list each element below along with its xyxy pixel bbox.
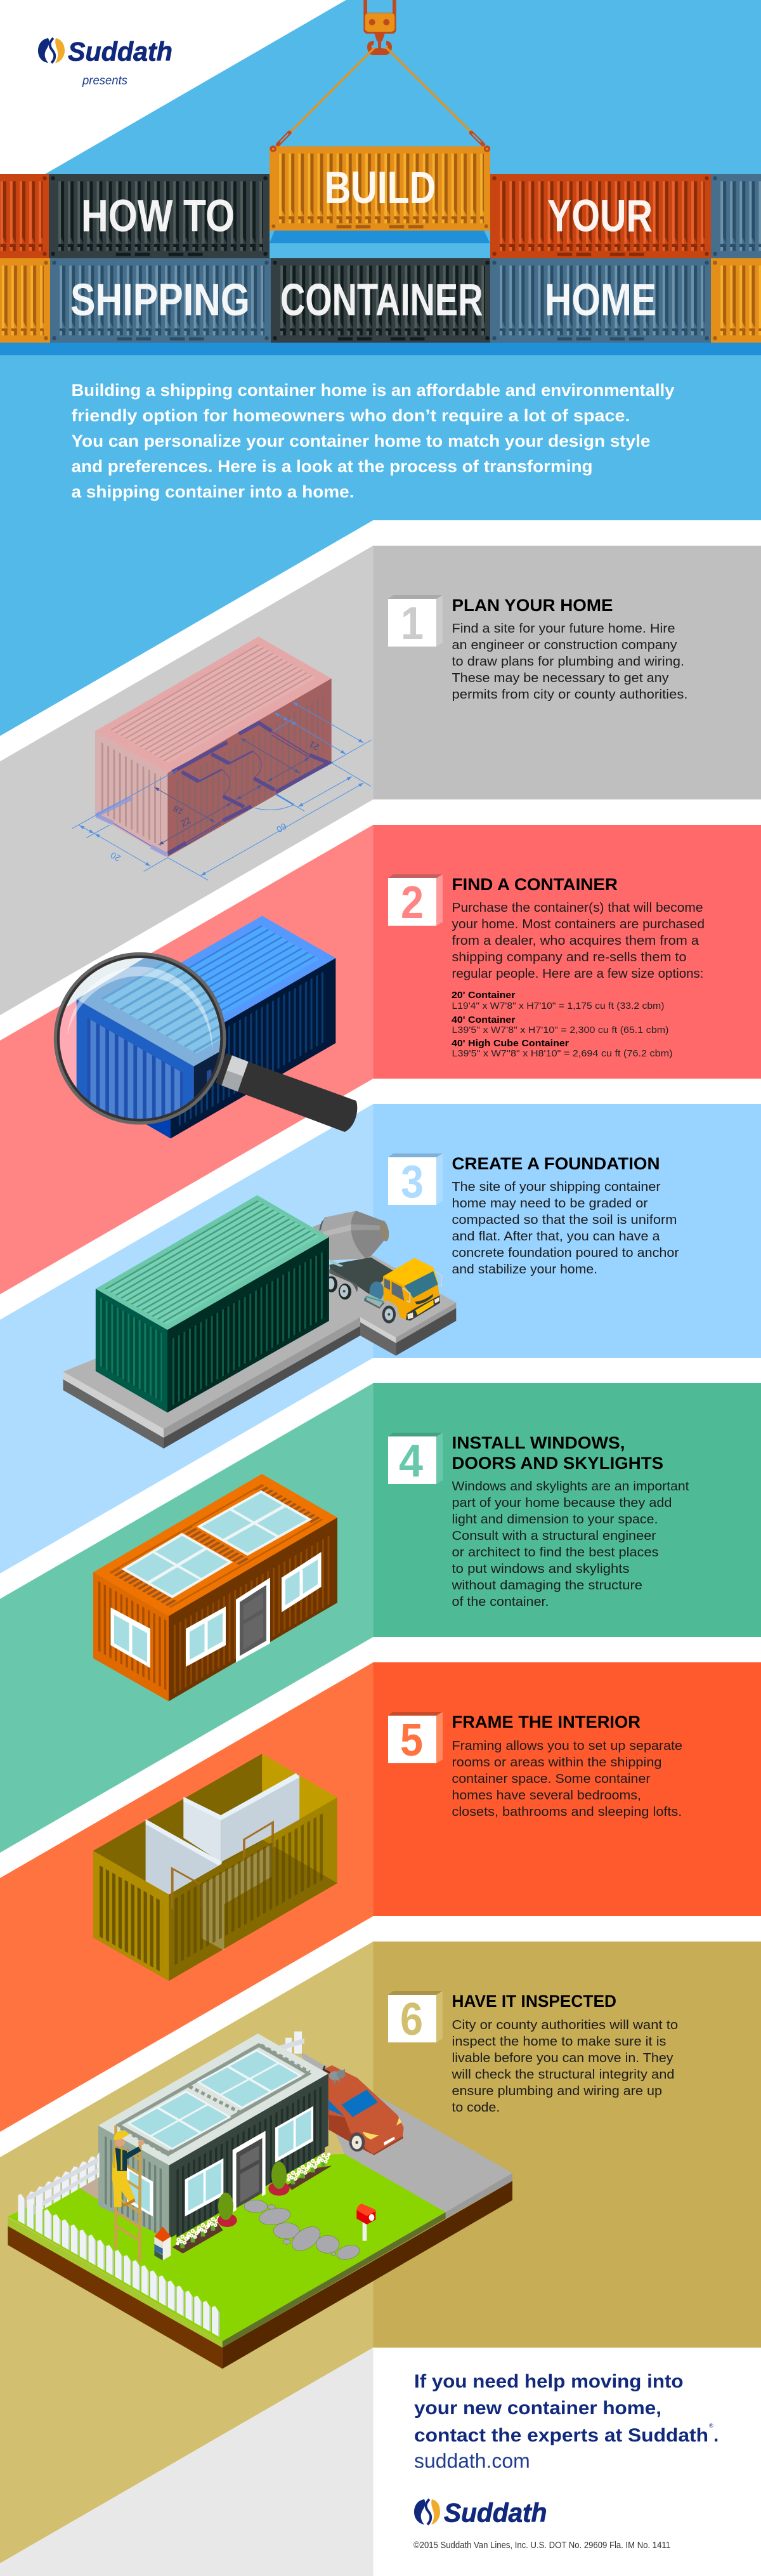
body 4: light and dimension to your space. xyxy=(452,1512,658,1527)
illustration: container on foundation with mixer truck xyxy=(63,1195,456,1449)
container: yellow right xyxy=(711,258,761,343)
container top xyxy=(97,916,335,1053)
intro text: friendly option for homeowners who don’t require a lot of space. xyxy=(71,406,630,425)
left wall window xyxy=(127,2167,153,2216)
body 2: Purchase the container(s) that will become xyxy=(452,900,703,915)
fence: back row xyxy=(27,2152,100,2219)
body 1: permits from city or county authorities. xyxy=(452,687,687,702)
container size list: L39'5" x W7''8" x H8'10" = 2,694 cu ft (76.2 cbm) xyxy=(452,1049,672,1059)
title text: YOUR xyxy=(547,192,653,241)
panel: step 6 have it inspected xyxy=(388,1991,678,2115)
title text: HOME xyxy=(545,275,656,325)
container right face xyxy=(171,958,335,1138)
cat xyxy=(323,2066,330,2073)
body 6 xyxy=(451,2018,678,2115)
house skylights xyxy=(127,2091,231,2150)
corner hooks xyxy=(271,147,490,151)
concrete driveway xyxy=(300,2051,512,2212)
body 4: part of your home because they add xyxy=(452,1495,672,1510)
body 6: livable before you can move in. They xyxy=(452,2051,673,2065)
container size list: 40' Container xyxy=(452,1015,516,1025)
body 3: and flat. After that, you can have a xyxy=(452,1229,660,1244)
body 3: and stabilize your home. xyxy=(452,1262,597,1277)
heading 3: CREATE A FOUNDATION xyxy=(452,1154,660,1173)
container left face xyxy=(97,1011,171,1138)
container size list: L39'5" x W7'8" x H7'10" = 2,300 cu ft (65.1 cbm) xyxy=(452,1025,668,1035)
lawn xyxy=(8,2154,446,2341)
shipping container green xyxy=(96,1195,329,1330)
left wall window xyxy=(110,1608,150,1668)
dimension lines xyxy=(72,702,372,880)
heading 1: PLAN YOUR HOME xyxy=(452,596,613,615)
body 5: homes have several bedrooms, xyxy=(452,1788,641,1803)
magnifier handle xyxy=(216,1053,232,1086)
ladder xyxy=(116,2126,140,2262)
footer call to action: ® xyxy=(709,2422,713,2429)
body 3: compacted so that the soil is uniform xyxy=(452,1212,677,1227)
partition walls xyxy=(146,1820,223,1895)
footer call to action: contact the experts at Suddath xyxy=(414,2425,708,2446)
body 3: The site of your shipping container xyxy=(452,1180,661,1194)
lens ring xyxy=(58,957,222,1120)
body 4: to put windows and skylights xyxy=(452,1561,629,1576)
panel: step 5 frame the interior xyxy=(388,1712,682,1819)
body 5: closets, bathrooms and sleeping lofts. xyxy=(452,1804,682,1819)
number badge 6: 6 xyxy=(400,1994,423,2045)
left wall xyxy=(93,1572,169,1701)
title text: SHIPPING xyxy=(70,275,250,325)
right wall window 2 xyxy=(186,1607,226,1667)
illustration: container with windows, door and skylights xyxy=(93,1474,337,1701)
footer call to action: your new container home, xyxy=(414,2398,661,2419)
logo: Suddath top: Suddath xyxy=(68,37,172,67)
panel: step 1 plan your home xyxy=(388,595,687,702)
intro text: Building a shipping container home is an affordable and environmentally xyxy=(71,381,675,400)
body 1 xyxy=(452,621,687,702)
number badge 3: 3 xyxy=(401,1157,424,1207)
container: blue row 2 right xyxy=(490,258,711,343)
crane hook and lifting ropes xyxy=(278,0,483,145)
container: red left xyxy=(0,174,49,258)
container: blue right xyxy=(711,174,761,258)
footer call to action: If you need help moving into xyxy=(414,2371,684,2392)
back fence corner xyxy=(277,2032,304,2057)
number badge 5: 5 xyxy=(400,1715,423,1766)
body 3: concrete foundation poured to anchor xyxy=(452,1245,679,1260)
body 2: from a dealer, who acquires them from a xyxy=(452,933,699,948)
illustration: finished home with garden xyxy=(8,2032,512,2369)
heading 2: FIND A CONTAINER xyxy=(452,875,618,894)
footer call to action: . xyxy=(713,2425,719,2446)
flower beds xyxy=(172,2222,223,2254)
title text: CONTAINER xyxy=(280,275,483,325)
interior back walls xyxy=(93,1754,262,1938)
blue ground strip xyxy=(0,343,761,355)
number badge 1 xyxy=(388,595,443,649)
number badge 4: 4 xyxy=(399,1436,423,1487)
container top xyxy=(95,636,332,773)
garden gnome xyxy=(154,2226,171,2261)
intro text: You can personalize your container home to match your design style xyxy=(71,431,651,450)
container stack and title xyxy=(0,146,761,355)
footer link: suddath.com xyxy=(414,2449,530,2472)
dimension labels xyxy=(108,739,321,864)
container: red row 1 xyxy=(490,174,711,258)
number badge 3 xyxy=(388,1153,443,1207)
dimension labels: 20 xyxy=(108,850,122,864)
intro text xyxy=(71,381,675,501)
fence: front row xyxy=(18,2192,220,2337)
container: yellow left xyxy=(0,258,50,343)
logo: Suddath footer: Suddath xyxy=(444,2498,547,2528)
parked car xyxy=(323,2065,404,2155)
body 2: your home. Most containers are purchased xyxy=(452,917,705,931)
dimension labels: 21 xyxy=(307,739,321,752)
body 4 xyxy=(451,1479,689,1609)
dimension labels: 60 xyxy=(275,821,289,835)
heading 4: DOORS AND SKYLIGHTS xyxy=(452,1454,663,1473)
container: blue row 2 xyxy=(50,258,271,343)
title text xyxy=(70,163,656,325)
body 5: rooms or areas within the shipping xyxy=(452,1755,662,1770)
container: dark row 1 xyxy=(49,174,270,258)
house left wall xyxy=(98,2126,169,2238)
blue strip under lifted container xyxy=(270,230,490,243)
container: dark row 2 xyxy=(271,258,491,343)
body 6: to code. xyxy=(452,2100,500,2115)
cement mixer truck xyxy=(313,1211,442,1324)
door frames xyxy=(172,1822,273,1909)
intro text: and preferences. Here is a look at the process of transforming xyxy=(71,457,592,476)
container right face xyxy=(167,678,332,857)
door swing xyxy=(276,794,294,805)
container left face xyxy=(95,731,167,857)
body 5 xyxy=(452,1738,682,1819)
body 5: Framing allows you to set up separate xyxy=(452,1738,682,1753)
roof xyxy=(93,1474,337,1616)
skylight B xyxy=(121,1533,233,1598)
stepping stones xyxy=(244,2200,361,2262)
body 2 xyxy=(452,900,705,981)
right front face translucent xyxy=(169,1797,337,1981)
body 3: home may need to be graded or xyxy=(452,1196,648,1211)
illustration: translucent container with floor plan xyxy=(72,636,372,880)
illustration: framed interior xyxy=(93,1754,337,1981)
body 3 xyxy=(452,1180,679,1277)
body 2: shipping company and re-sells them to xyxy=(452,950,686,964)
floor plan walls xyxy=(168,723,328,853)
house roof xyxy=(98,2034,328,2165)
white corner behind logo xyxy=(0,0,346,174)
body 6: will check the structural integrity and xyxy=(451,2067,675,2082)
skylight A xyxy=(197,1490,312,1556)
footer call to action xyxy=(414,2371,719,2446)
body 6: City or county authorities will want to xyxy=(452,2018,678,2032)
soil layers xyxy=(8,2226,223,2369)
magnified lens content xyxy=(60,958,221,1119)
door xyxy=(233,2131,266,2212)
panel: step 3 create a foundation xyxy=(388,1153,679,1277)
copyright: ©2015 Suddath Van Lines, Inc. U.S. DOT No. 29609 Fla. IM No. 1411 xyxy=(413,2540,670,2551)
intro text: a shipping container into a home. xyxy=(71,482,354,501)
window 1 xyxy=(185,2159,223,2216)
container size list: 40' High Cube Container xyxy=(452,1039,569,1049)
title text: BUILD xyxy=(325,163,436,213)
mailbox xyxy=(356,2204,375,2241)
patio xyxy=(79,2176,98,2200)
number badge 6 xyxy=(388,1991,443,2045)
heading 6: HAVE IT INSPECTED xyxy=(452,1992,616,2011)
body 5: container space. Some container xyxy=(452,1771,651,1786)
right wall xyxy=(169,1518,337,1701)
container size list xyxy=(452,990,672,1059)
title text: HOW TO xyxy=(81,192,235,241)
number badge 1: 1 xyxy=(401,598,424,649)
number badge 2: 2 xyxy=(401,877,424,928)
body 6: ensure plumbing and wiring are up xyxy=(452,2084,662,2098)
body 4: or architect to find the best places xyxy=(452,1545,658,1560)
door xyxy=(236,1577,270,1662)
container: lifted yellow xyxy=(270,146,490,231)
heading 5: FRAME THE INTERIOR xyxy=(452,1712,641,1732)
right wall window 1 xyxy=(282,1552,322,1612)
number badge 4 xyxy=(388,1433,443,1487)
number badge 5 xyxy=(388,1712,443,1766)
heading 4 xyxy=(452,1433,663,1473)
panel: step 4 install windows xyxy=(388,1433,689,1609)
body 1: to draw plans for plumbing and wiring. xyxy=(452,654,684,669)
body 4: without damaging the structure xyxy=(451,1578,642,1593)
number badge 2 xyxy=(388,874,443,928)
dimension labels: 18 xyxy=(171,803,185,817)
text: presents: presents xyxy=(82,74,127,88)
concrete slab xyxy=(63,1255,456,1429)
body 6: inspect the home to make sure it is xyxy=(452,2034,666,2049)
body 4: Windows and skylights are an important xyxy=(452,1479,689,1494)
ghost walls on left face xyxy=(96,798,167,855)
worker on ladder xyxy=(112,2131,144,2207)
body 4: of the container. xyxy=(452,1594,549,1609)
container size list: 20' Container xyxy=(452,990,516,1001)
body 1: These may be necessary to get any xyxy=(452,671,669,685)
illustration: blue container under magnifying glass xyxy=(53,916,358,1138)
body 1: Find a site for your future home. Hire xyxy=(452,621,675,636)
body 1: an engineer or construction company xyxy=(452,638,677,652)
body 2: regular people. Here are a few size options: xyxy=(452,966,704,981)
container size list: L19'4" x W7'8" x H7'10" = 1,175 cu ft (33.2 cbm) xyxy=(452,1001,665,1011)
body 4: Consult with a structural engineer xyxy=(452,1528,656,1543)
left front face xyxy=(93,1851,169,1981)
house right wall xyxy=(169,2073,328,2238)
potted shrubs xyxy=(218,2162,290,2227)
window 2 xyxy=(275,2106,313,2162)
dimension labels: 22 xyxy=(179,815,192,829)
panel: step 2 find a container xyxy=(388,874,705,1059)
heading 4: INSTALL WINDOWS, xyxy=(452,1433,625,1452)
